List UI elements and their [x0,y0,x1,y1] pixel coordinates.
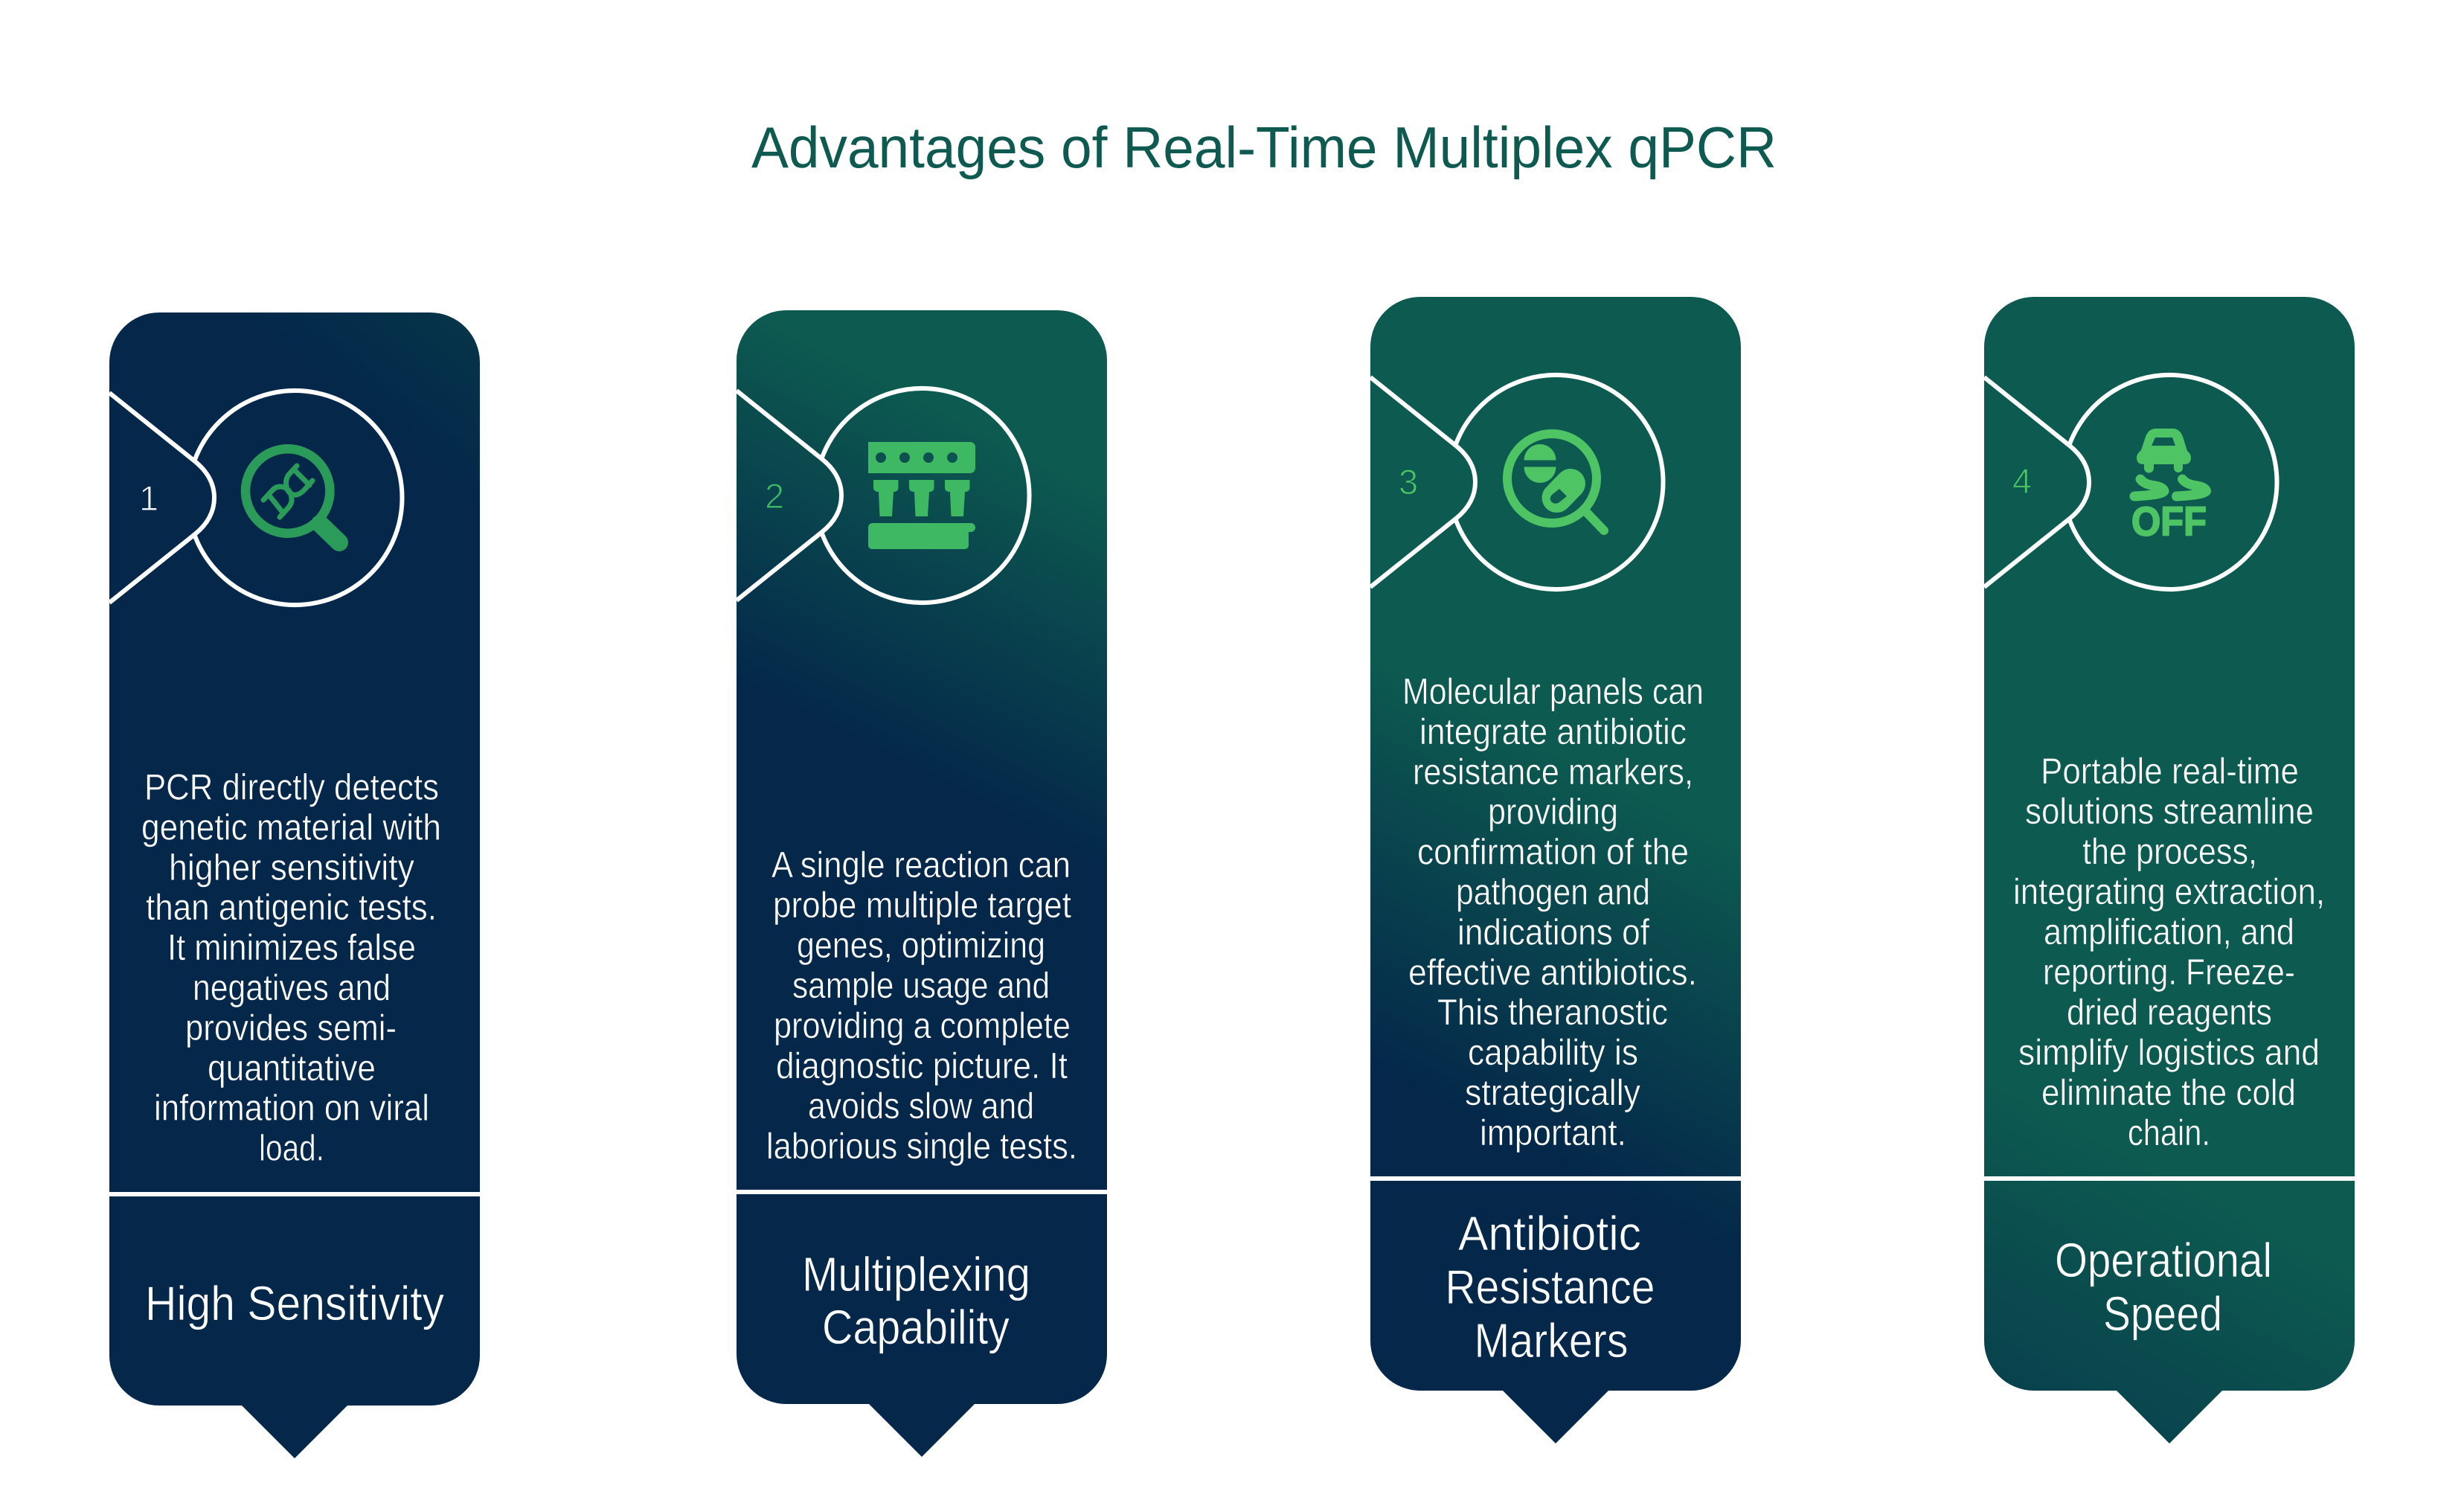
body text: provides semi- [185,1008,397,1048]
body text: higher sensitivity [169,847,414,888]
icon: traction control off: OFF [2131,499,2207,545]
body text: genes, optimizing [797,926,1045,966]
icon: traction control off [2131,429,2207,545]
body text: chain. [2128,1113,2210,1153]
heading: Antibiotic [1458,1206,1641,1260]
body text: effective antibiotics. [1408,952,1697,993]
panel: antibiotic resistance markers [1370,297,1741,1443]
panel: operational speed [1984,297,2355,1443]
body text: probe multiple target [773,885,1071,926]
body text: dried reagents [2067,993,2272,1033]
body text: resistance markers, [1413,752,1693,792]
icon: DNA magnifier [246,449,339,542]
body text: amplification, and [2044,912,2294,952]
body text [766,845,1077,1167]
title: Advantages of Real-Time Multiplex qPCR [751,115,1777,180]
body text: pathogen and [1456,872,1650,912]
body text: negatives and [193,968,391,1008]
heading [802,1247,1030,1354]
body text: indications of [1457,912,1649,952]
card shape with pointer [1984,297,2355,1443]
heading: Operational [2055,1233,2272,1287]
body text: PCR directly detects [144,768,439,808]
icon circle [2069,375,2277,589]
body text: reporting. Freeze- [2043,952,2295,993]
body text: avoids slow and [808,1086,1034,1126]
body text: quantitative [208,1048,376,1089]
body text: than antigenic tests. [146,888,437,928]
step number 3: 3 [1399,462,1418,501]
body text: integrating extraction, [2013,872,2325,912]
body text: load. [259,1129,324,1169]
heading: High Sensitivity [145,1276,444,1330]
panel: multiplexing capability [737,310,1107,1457]
body text: simplify logistics and [2018,1033,2320,1073]
body text: This theranostic [1437,993,1668,1033]
panel: high sensitivity [109,312,480,1458]
body text: important. [1480,1113,1626,1153]
icon circle [821,388,1030,603]
heading: Capability [822,1300,1010,1354]
body text [141,768,441,1169]
icon: pills magnifier [1507,434,1604,531]
body text: sample usage and [792,966,1050,1006]
body text: solutions streamline [2025,792,2314,832]
card shape with pointer [109,312,480,1458]
body text [2013,751,2325,1153]
card shape with pointer [1370,297,1741,1443]
body text: Molecular panels can [1402,672,1704,712]
body text: providing [1488,792,1618,833]
card shape with pointer [737,310,1107,1457]
step number 2: 2 [765,476,784,516]
body text: capability is [1468,1033,1638,1073]
heading: Markers [1475,1313,1628,1368]
body text: the process, [2082,832,2257,872]
body text: eliminate the cold [2041,1073,2296,1113]
body text: diagnostic picture. It [776,1046,1068,1086]
body text: Portable real-time [2041,751,2299,792]
body text: integrate antibiotic [1419,712,1687,752]
step number 4: 4 [2012,461,2032,501]
step number 1: 1 [139,478,158,518]
body text: providing a complete [774,1006,1071,1046]
icon circle [1455,375,1663,589]
body text: strategically [1465,1073,1640,1113]
body text: A single reaction can [771,845,1071,885]
heading: Resistance [1445,1260,1655,1314]
body text [1402,672,1704,1153]
body text: laborious single tests. [766,1126,1077,1167]
icon circle [194,391,402,605]
heading [2055,1233,2272,1341]
body text: genetic material with [141,807,441,847]
icon: multichannel pipette [868,442,975,549]
number tab [1370,377,1475,587]
number tab [1984,377,2089,587]
number tab [737,391,841,600]
body text: confirmation of the [1417,833,1689,873]
heading [1445,1206,1655,1368]
body text: information on viral [154,1089,429,1129]
heading: Speed [2103,1286,2222,1341]
number tab [109,393,214,603]
heading: Multiplexing [802,1247,1030,1301]
body text: It minimizes false [167,928,416,968]
